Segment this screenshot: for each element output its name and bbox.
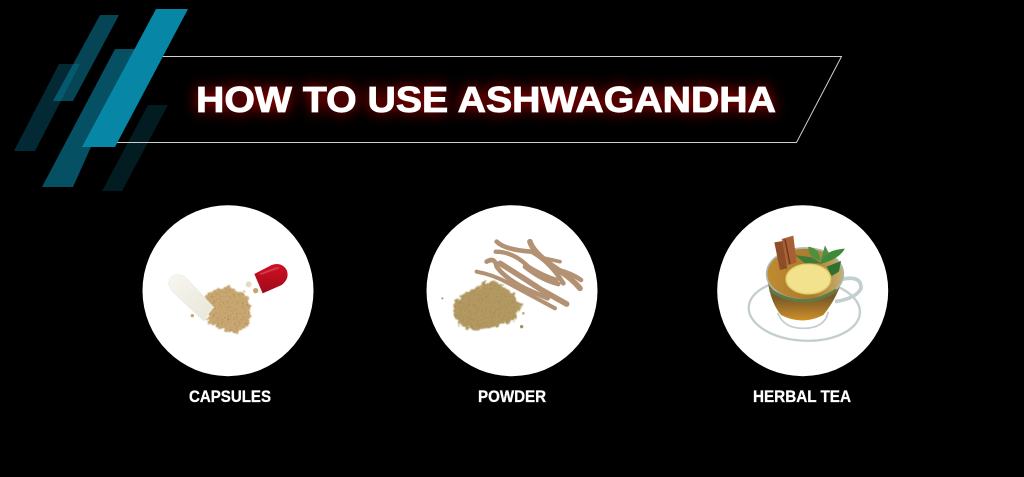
label: powder: POWDER	[478, 388, 546, 406]
panel: powder	[426, 205, 598, 406]
icon: glass tea cup on saucer	[747, 236, 862, 344]
panel: capsules	[142, 205, 314, 406]
icon: capsules with powder	[169, 264, 288, 333]
title: HOW TO USE ASHWAGANDHA	[196, 79, 776, 120]
powder circle	[426, 205, 598, 376]
capsules circle	[142, 205, 314, 376]
herbal tea circle	[717, 205, 888, 376]
decorative diagonal bands	[14, 15, 168, 191]
title banner outline	[113, 56, 842, 142]
label: herbal tea: HERBAL TEA	[753, 388, 851, 406]
panel: herbal tea	[717, 205, 888, 406]
label: capsules: CAPSULES	[189, 388, 271, 406]
icon: powder pile and roots	[441, 242, 581, 332]
bright diagonal band	[82, 9, 188, 147]
